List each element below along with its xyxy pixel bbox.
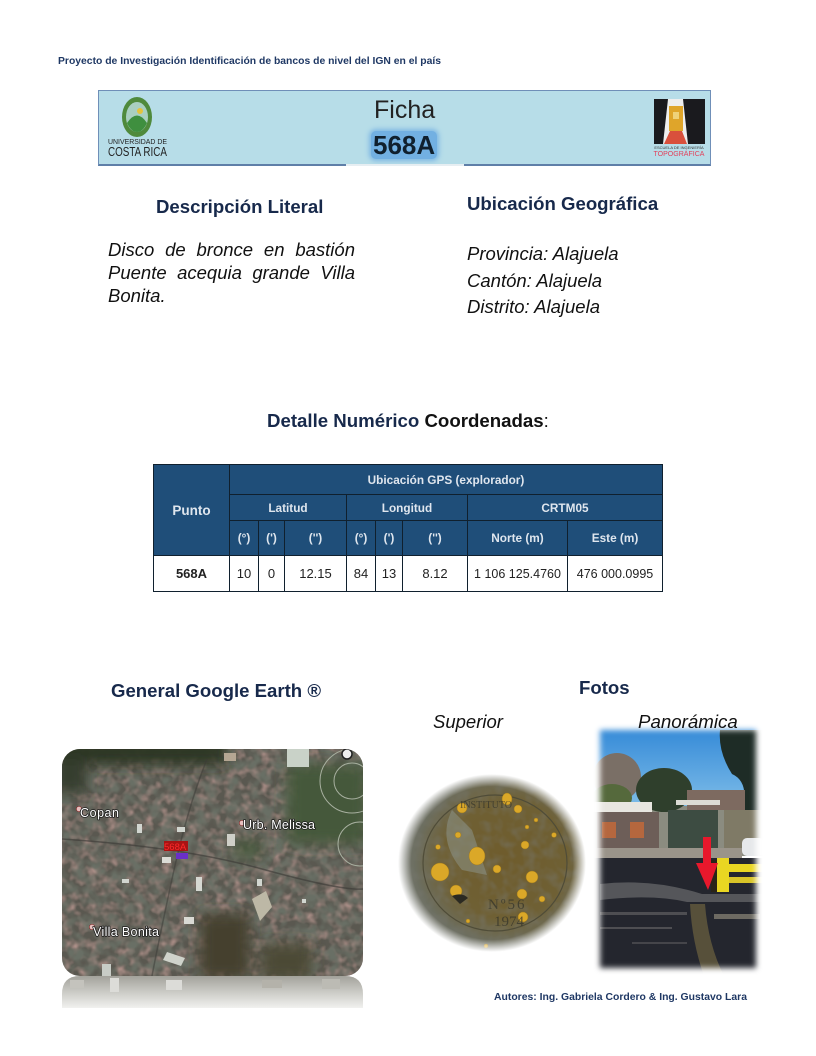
red arrow bbox=[696, 837, 718, 890]
point marker 568A: 568A bbox=[164, 842, 187, 853]
photo: bronze disc, top view: INSTITUTO bbox=[460, 800, 512, 811]
coordinates table: (°) bbox=[355, 531, 367, 545]
coordinates table: (') bbox=[266, 531, 277, 545]
text block: location: Provincia: Alajuela bbox=[467, 243, 619, 264]
code badge: 568A: 568A bbox=[373, 130, 435, 160]
logo: Escuela de Topografía: ESCUELA DE INGENIERÍA bbox=[654, 145, 704, 150]
coordinates table: 1 106 125.4760 bbox=[474, 566, 561, 580]
photo: panoramic street view bbox=[595, 725, 761, 973]
photo: bronze disc, top view bbox=[399, 774, 586, 952]
coordinates table: ('') bbox=[309, 531, 322, 545]
logo: Escuela de Topografía bbox=[654, 99, 705, 158]
place labels bbox=[77, 806, 315, 939]
coordinates table: Ubicación GPS (explorador) bbox=[368, 472, 524, 486]
text block: location: Distrito: Alajuela bbox=[467, 296, 600, 317]
coordinates table: Este (m) bbox=[592, 531, 638, 545]
trees bbox=[596, 753, 641, 796]
text block: location bbox=[467, 243, 619, 317]
map image bbox=[62, 749, 363, 1008]
photo: bronze disc, top view: Nº56 bbox=[488, 897, 526, 913]
banner bbox=[98, 90, 711, 166]
roads and roofs bbox=[62, 839, 363, 889]
sidewalk and road bbox=[596, 848, 742, 858]
heading: Detalle Numérico Coordenadas: Detalle Numérico Coordenadas: bbox=[267, 410, 549, 431]
coordinates table bbox=[153, 464, 663, 592]
banner notch bbox=[346, 164, 464, 166]
title: Ficha: Ficha bbox=[374, 96, 435, 124]
text block: description: Disco de bronce en bastión Puente acequia grande Villa Bonita. bbox=[108, 239, 355, 306]
place labels: Urb. Melissa bbox=[243, 818, 315, 832]
logo: Universidad de Costa Rica bbox=[108, 97, 167, 159]
coordinates table: 84 bbox=[354, 566, 368, 581]
coordinates table: 10 bbox=[237, 566, 251, 581]
coordinates table: CRTM05 bbox=[541, 500, 589, 514]
photo: bronze disc, top view: 1974 bbox=[494, 914, 524, 930]
coordinates table: 568A bbox=[176, 566, 207, 581]
heading: Ubicación Geográfica: Ubicación Geográfica bbox=[467, 193, 658, 214]
caption: Superior: Superior bbox=[433, 711, 503, 732]
place labels: Villa Bonita bbox=[93, 925, 159, 939]
heading: Fotos: Fotos bbox=[579, 677, 630, 698]
text block: location: Cantón: Alajuela bbox=[467, 270, 602, 291]
coordinates table: 476 000.0995 bbox=[577, 566, 653, 580]
authors footer: Autores: Ing. Gabriela Cordero & Ing. Gustavo Lara bbox=[494, 991, 747, 1003]
heading: General Google Earth: General Google Earth ® bbox=[111, 680, 321, 701]
coordinates table: Punto bbox=[172, 502, 211, 518]
logo: Escuela de Topografía: TOPOGRÁFICA bbox=[654, 149, 705, 158]
place labels: Copan bbox=[80, 806, 119, 820]
coordinates table: Latitud bbox=[268, 500, 308, 514]
coordinates table: (') bbox=[384, 531, 394, 545]
buildings bbox=[687, 790, 745, 810]
point marker 568A bbox=[164, 841, 188, 859]
coordinates table: ('') bbox=[428, 531, 442, 545]
car bbox=[742, 838, 760, 856]
coordinates table: 0 bbox=[268, 566, 275, 581]
coordinates table: Norte (m) bbox=[491, 531, 544, 545]
running header: Proyecto de Investigación Identificación de bancos de nivel del IGN en el país bbox=[58, 55, 441, 67]
map reflection bbox=[62, 976, 363, 1008]
coordinates table: 12.15 bbox=[299, 566, 332, 581]
heading: Descripción Literal: Descripción Literal bbox=[156, 196, 323, 217]
coordinates table: Longitud bbox=[382, 500, 432, 514]
coordinates table: 8.12 bbox=[422, 566, 448, 581]
caption: Panorámica: Panorámica bbox=[638, 711, 738, 732]
coordinates table: 13 bbox=[382, 566, 396, 581]
coordinates table: (°) bbox=[238, 531, 250, 545]
yellow barrier bbox=[717, 858, 729, 892]
